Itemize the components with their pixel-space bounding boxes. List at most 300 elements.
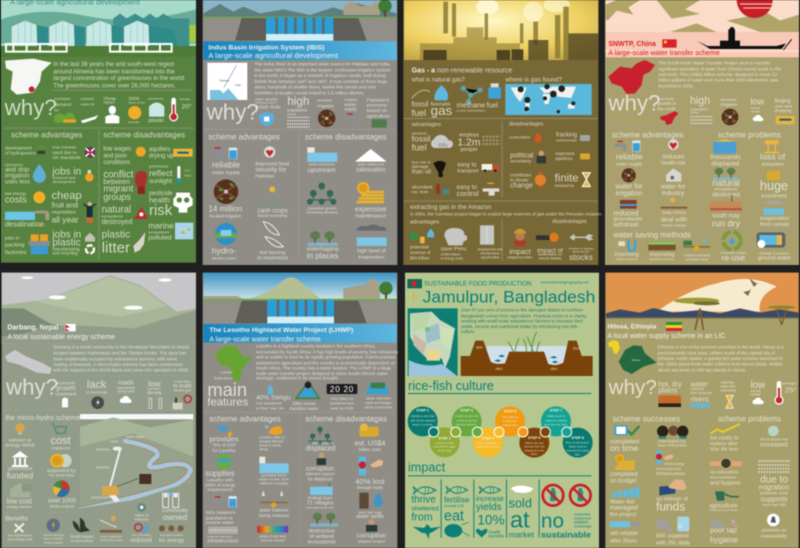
- disadvantage: expensive maintenance: [355, 182, 387, 219]
- heading: main features: features: [207, 396, 249, 408]
- advantage: easy to control: [457, 183, 499, 198]
- reason: farmland irrigation: [721, 97, 738, 125]
- disadvantage: climate change: contributes: [510, 172, 531, 177]
- disadvantage: declining fish stocks: stocks: [569, 252, 593, 262]
- success: no misuse of funds: no misuse of: [656, 497, 688, 503]
- benefit: less deforestation: [159, 525, 185, 544]
- success: completed on time: on time: [610, 443, 639, 453]
- title: Hitosa, Ethiopia: [607, 323, 657, 330]
- advantage: hydroponics: development: [5, 145, 32, 150]
- heading: disadvantages: disadvantages: [509, 121, 544, 127]
- text block: introduction: The greenhouses cover over 26,000 hectares.: [53, 83, 176, 89]
- disadvantage: pesticide health risk: [149, 191, 193, 219]
- advantage: less risk than oil: [412, 159, 446, 177]
- advantage: fresh water: [259, 457, 289, 486]
- advantage: fish farming: [257, 222, 288, 261]
- heading: main features: [207, 379, 249, 408]
- reason: low rainfall: low: [751, 97, 765, 107]
- success: small charge: small charge: [664, 462, 685, 466]
- advantage: drip irrigation: uses less: [5, 180, 30, 186]
- disadvantage: Polihali Dam villages: lose agricultural land: [306, 506, 334, 510]
- text block: introduction: the 1990s piped fresh water 140kms from Mount Bada, 4000m: [658, 362, 783, 367]
- scheme: solution to energy deficit: energy deficit: [5, 443, 35, 449]
- reason: economic growth: [657, 96, 678, 125]
- reason: cheap migrant labour: migrant: [103, 101, 115, 105]
- advantage: provides GDP: 75% of GDP: [212, 443, 236, 448]
- text block: introduction: The Indus River is an important water source for Pakistan and India,: [254, 61, 390, 66]
- advantage: drip irrigation: irrigation: [5, 173, 30, 180]
- disadvantage: climate change: to climate: [510, 177, 529, 182]
- step 1: Identify a site that: [411, 414, 435, 418]
- title band with boat: A large-scale water transfer scheme: [608, 50, 720, 57]
- success: managed by local communities: [657, 426, 688, 448]
- step 5: purified for: [503, 419, 517, 423]
- reason: lack of electricity: of electricity: [86, 390, 107, 395]
- step 8: reduced for catch: [566, 449, 590, 453]
- impact: no chemicals sustainable: sustainable: [541, 529, 591, 539]
- problem: poor tap hygiene: poor tap: [710, 526, 737, 535]
- problem: no education: and hygiene: [710, 480, 741, 486]
- step 3: A ditch for the fish: [455, 414, 479, 418]
- disadvantage: salinisation: [355, 149, 387, 173]
- impact: no chemicals sustainable: knowledge: [574, 525, 591, 529]
- scene: savanna sunset: [606, 273, 799, 330]
- method: recharge ground water: [757, 232, 791, 262]
- title band: [203, 324, 397, 343]
- advantage: jobs in packing factories: [4, 234, 50, 256]
- disadvantage: expensive maintenance: maintenance: [355, 213, 386, 219]
- scheme: low cost energy: low cost: [7, 498, 32, 505]
- benefit: less deforestation: for energy: [159, 538, 185, 544]
- scene: Himalayan mountains: [2, 273, 196, 343]
- text block: introduction: [658, 60, 782, 88]
- advantage: drip irrigation: and drip: [5, 167, 29, 174]
- disadvantage: natural ecosystems destroyed: ecosystems: [102, 213, 123, 218]
- disadvantage: poor can't pay tariffs: [356, 493, 384, 520]
- panel: Darbang Nepal: [2, 273, 196, 548]
- disadvantage: US$4 billion: est. US$4: [355, 440, 385, 447]
- title: Darbang, Nepal: [7, 324, 59, 331]
- impact: increase yields 10%: benefits: [489, 534, 504, 539]
- advantage: improved transport infrastructure: infrastructure: [207, 538, 238, 544]
- problem: risk of disease: [760, 426, 788, 449]
- problem: too costly to replace: 30yr life time: [710, 446, 738, 452]
- success: no misuse of funds: [656, 479, 688, 514]
- text block: introduction: Ethiopia is one of the poorest countries in the world. Hitosa is a: [658, 345, 784, 350]
- disadvantage: 40% lost through leaks: [355, 457, 386, 490]
- reason: cheap migrant labour: [103, 96, 119, 123]
- disadvantage: low wages: and poor: [103, 153, 127, 159]
- text block: introduction: Darbang is a small community in the Himalayan Mountains in Nepal,: [53, 345, 190, 350]
- success: still reliable: [610, 521, 640, 545]
- advantage: cheap fruit and vegetables: all year: [52, 214, 79, 224]
- reason: water security: water security: [255, 97, 278, 101]
- disadvantage: deforestation impact: impact of: [537, 247, 563, 254]
- advantage: hydroponics: of hydroponics: [5, 150, 36, 155]
- method: re-use: increase water: [720, 250, 747, 255]
- advantage: cleanest fossil fuel: fossil: [412, 134, 431, 144]
- text block: introduction: [53, 62, 186, 89]
- reason: temperature: 25°: [785, 385, 797, 394]
- reason: lack of electricity: [86, 379, 107, 409]
- advantage: fish farming: fish farming: [260, 250, 286, 256]
- success: 65K supplied: 25L: [677, 524, 683, 528]
- text block: introduction: around Almeria has been transformed into the: [53, 69, 175, 75]
- advantage: hydroelectric power: electric power: [212, 255, 237, 260]
- problem: no education: [710, 458, 742, 486]
- disadvantage: destruction of wetlands: destruction: [309, 529, 335, 535]
- impact: fertilise and eat: eat: [444, 509, 464, 525]
- scheme: World Bank: The World Bank: [48, 474, 75, 478]
- title: A local water supply scheme in an LIC: [607, 333, 725, 340]
- disadvantage: waterlogging: in places: [307, 251, 338, 260]
- scheme: solution to energy deficit: [5, 423, 35, 449]
- scheme: World Bank: [47, 454, 76, 478]
- text block: introduction: above sea level, to 160 tap stands in Hitosa.: [658, 367, 746, 372]
- step 1: will not be washed: [410, 418, 435, 422]
- impact: increase yields 10%: 10%: [477, 512, 505, 527]
- reason: reliable water supply: water: [344, 102, 357, 108]
- advantage: water balance: [259, 490, 289, 518]
- disadvantage: aquifers drying: [149, 147, 193, 159]
- text block: introduction: subsistence agriculture and the country is economically dependent on: [256, 360, 396, 365]
- success: small charge: infrastructure: [656, 471, 685, 477]
- problem: too costly to replace: [710, 424, 740, 452]
- problem: thousands displaced: displaced: [711, 160, 740, 167]
- method: improving irrigation efficiency: [614, 240, 639, 261]
- benefit: risk of flooding reduced: reduced: [130, 538, 152, 544]
- success: managed by local communities: local communities: [657, 444, 687, 448]
- feature: dams and reservoirs: will be constructed: [365, 405, 392, 409]
- advantage: potential revenue: $34 billion: [410, 255, 430, 260]
- advantage: reliable water supply: reliable: [212, 160, 240, 170]
- reason: plastic: greenhouses: [148, 96, 164, 100]
- impact: sold at market: market: [509, 529, 535, 539]
- reason: roads inaccessible: roads: [118, 380, 134, 387]
- reason: sunshine: 3000: [128, 96, 140, 102]
- feature: 2020 counter: 20 20: [330, 384, 354, 394]
- heading: Amazon advantages: advantages: [410, 219, 439, 225]
- reason: Beijing water table: water table: [775, 104, 793, 108]
- reason: water security: [255, 97, 281, 127]
- benefit: community owned: owned: [163, 512, 188, 522]
- reason: high population: forces: [691, 111, 699, 115]
- reason: farmland irrigation: farmland: [721, 97, 736, 102]
- scene: greenhouses banner: [1, 0, 196, 57]
- disadvantage: 40% lost through leaks: through leaks: [357, 485, 383, 490]
- illustration: micro-hydro valley: [80, 414, 193, 548]
- advantage: reduced groundwater: [612, 200, 643, 229]
- text block: introduction: Bangladesh comes from agriculture. Practical Action is a charity: [461, 313, 587, 318]
- disadvantage: expensive pipelines: [555, 151, 590, 161]
- disadvantage: declining fish stocks: declining fish: [572, 250, 590, 254]
- problem: too costly to replace: replace after: [710, 441, 738, 447]
- advantage: cash crops: [257, 186, 288, 218]
- icon: methane: methane: [457, 101, 485, 110]
- reason: cheap migrant labour: cheap: [103, 96, 116, 101]
- advantage: water balance: being restored: [259, 513, 289, 518]
- disadvantage: fracking: controversial: [556, 139, 577, 143]
- reason: temperature: 20°: [182, 102, 192, 110]
- scheme: government funded: [7, 451, 33, 480]
- benefit: women healthcare: [100, 516, 122, 542]
- disadvantage: corruption support: affected support: [306, 471, 335, 476]
- step 4: [473, 427, 503, 457]
- advantage: supplies energy: [205, 454, 236, 492]
- disadvantage: people displaced: displaced: [306, 446, 336, 453]
- impact: no chemicals sustainable: [541, 485, 591, 539]
- impact: no chemicals sustainable: no: [541, 510, 564, 533]
- advantage: cheap fruit and vegetables: fruit and: [52, 200, 78, 209]
- advantage: cleanest fossil fuel: fuel: [412, 143, 427, 153]
- step 7: and rice into field.: [544, 423, 568, 427]
- disadvantage: waterlogging: waterlogging: [306, 247, 339, 253]
- advantage: employment and infrastructure: employment and: [478, 248, 502, 252]
- step 6: ditch.: [531, 452, 538, 456]
- advantage: help China deal with climate change: deal with: [661, 216, 687, 223]
- disadvantage: declining fish stocks: [568, 234, 594, 262]
- benefit: community owned: community: [162, 508, 188, 514]
- disadvantage: plastic litter: [102, 229, 145, 256]
- disadvantage: Polihali Dam villages: 71 villages: [307, 501, 334, 507]
- heading: scheme disadvantages: scheme disadvantages: [103, 131, 185, 140]
- advantage: employs 1.2m people: employs: [459, 132, 479, 138]
- scheme: solution to energy deficit: solution to: [9, 438, 32, 444]
- benefit: reliable energy supply: have a reliable: [44, 537, 63, 541]
- reason: roads inaccessible: during rains: [117, 390, 135, 394]
- advantage: improved food security: security for: [255, 166, 286, 173]
- reason: economic growth: [55, 380, 76, 407]
- problem: agriculture water: agriculture: [709, 503, 738, 509]
- advantage: jobs in plastic: and recycling: [52, 251, 78, 256]
- icon: methane: & other hydrocarbons: [457, 109, 486, 113]
- step 6: When the rice: [525, 441, 544, 445]
- heading: why: why?: [4, 95, 57, 120]
- advantage: save Peru money: save Peru: [441, 247, 466, 253]
- reason: low population density: [147, 378, 162, 408]
- benefit: low maintenance: [8, 523, 33, 541]
- advantage: help China deal with climate change: help China: [662, 210, 686, 216]
- problem: agriculture water: using too much water: [709, 508, 738, 512]
- reason: hot dry plains: plains: [658, 386, 678, 395]
- text block: introduction: been traditionally occupied by subsistence farmers, with some: [53, 356, 178, 361]
- success: completed on time: completed: [610, 438, 640, 445]
- reason: high population growth: growth: [287, 112, 297, 116]
- impact: no chemicals sustainable: expensive: [574, 512, 590, 516]
- advantage: save Peru money: US$4 billion: [441, 252, 460, 256]
- title: A local sustainable energy scheme: [7, 334, 115, 341]
- disadvantage: natural ecosystems destroyed: [102, 205, 148, 226]
- problem: no education: about sanitation: [710, 475, 736, 479]
- text block: introduction: located between Kathmandu and the Tibetan border. The area has: [53, 351, 187, 356]
- reason: high population: high: [690, 95, 710, 107]
- benefit: reliable energy supply: [43, 519, 64, 544]
- text block: introduction: surrounded by South Africa. It has high levels of poverty, few resources: [256, 349, 399, 354]
- reason: high population growth: [287, 95, 309, 127]
- reason: unaffordable power station: electric grid: [174, 388, 191, 392]
- disadvantage: impact on indigenous tribes: [507, 229, 533, 259]
- text block: introduction: trillion gallons of water over more than 1000 kilometres, was: [658, 78, 779, 83]
- reason: low population density: low: [148, 378, 162, 388]
- connector badges: [429, 427, 572, 437]
- advantage: improved food security: [255, 146, 289, 180]
- advantage: low energy costs: [5, 191, 45, 205]
- advantage: water for irrigation: irrigation: [616, 190, 643, 197]
- reason: roads inaccessible: [117, 380, 135, 406]
- diagram: rice-fish pond cross-section: ditch: [495, 367, 503, 371]
- scheme: government funded: government: [8, 466, 33, 471]
- success: managed by local communities: managed by: [658, 439, 686, 445]
- step 7: Water level is: [547, 414, 565, 418]
- benefit: risk of flooding reduced: [130, 524, 152, 544]
- problem: natural ecosystems destroyed: [712, 168, 740, 199]
- heading: scheme advantages: scheme advantages: [612, 131, 683, 140]
- reason: unaffordable power station: to build: [173, 384, 191, 390]
- icon: flammable gas: gas: [431, 103, 452, 118]
- reason: Beijing water table: [775, 99, 794, 124]
- disadvantage: low wages: [103, 147, 146, 166]
- problem: south may run dry: south may: [712, 214, 740, 220]
- advantage: jobs in plastic: jobs in: [51, 229, 81, 240]
- benefit: small impact on environment: on environment: [71, 539, 94, 543]
- scene: mountains and red sun: [606, 0, 799, 32]
- advantage: supplies energy: Lesotho with: [207, 478, 233, 483]
- problem: huge investment: [760, 171, 788, 199]
- map: Ethiopia: Hitosa: [632, 358, 640, 362]
- disadvantage: impact on indigenous tribes: indigenous tribes: [507, 255, 533, 259]
- icon: flammable gas: [431, 85, 452, 118]
- step 8: STEP 8: [571, 436, 584, 440]
- heading: extracting gas in the Amazon: extracting gas in the Amazon: [410, 204, 492, 211]
- reason: water collected rivers: rivers: [691, 395, 709, 404]
- disadvantage: water extraction upstream: upstream: [308, 167, 336, 174]
- step 3: [452, 406, 482, 436]
- map: China: [608, 60, 655, 94]
- title band with boat: SNWTP, China: [608, 41, 656, 48]
- disadvantage: corruption plagued: corruption: [357, 532, 386, 539]
- advantage: water to drought: provides water to: [259, 435, 285, 439]
- panel: Gas non-renewable resource: [403, 0, 603, 265]
- text block: introduction: two asian NEEs.The IBIS is the largest, continuous irrigation system: [254, 67, 391, 72]
- reason: increased demand: demand: [54, 102, 72, 107]
- benefit: small impact on environment: [70, 517, 95, 543]
- reason: water collected rivers: water: [690, 381, 708, 388]
- heading: water saving methods: water saving methods: [612, 231, 691, 240]
- title band: A large-scale water transfer scheme: [209, 336, 321, 343]
- disadvantage: marine ecosystems polluted: marine: [148, 220, 174, 230]
- title band: A large-scale agricultural development: [208, 51, 339, 60]
- success: Water Aid managed: [610, 487, 639, 518]
- problem: loss of antiquities: [760, 140, 786, 168]
- reason: unaffordable power station: [173, 380, 191, 409]
- step 1: [408, 406, 438, 436]
- title: Jamulpur Bangladesh: Jamulpur, Bangladesh: [423, 288, 595, 306]
- success: completed on budget: completed: [610, 472, 638, 478]
- step 2: around the edge: [434, 445, 456, 449]
- reason: water collected rivers: collected: [691, 387, 704, 391]
- disadvantage: destruction of wetlands: ecosystems: [308, 539, 336, 545]
- text block: introduction: yields, income and nutritional intake by introducing rice-fish: [461, 324, 578, 329]
- title: [607, 322, 725, 340]
- feature: 2020 counter: transferred each: [330, 401, 354, 405]
- text block: introduction: Lesotho is a highland country located in the southern Africa,: [256, 343, 375, 348]
- disadvantage: 40% lost through leaks: 40% lost: [355, 477, 386, 486]
- advantage: Maseru population water: population to: [206, 515, 233, 520]
- advantage: provides GDP: for Lesotho: [212, 448, 236, 453]
- heading: micro-hydro scheme: the micro-hydro scheme: [5, 415, 80, 422]
- heading: scheme advantages: scheme advantages: [209, 415, 281, 424]
- disadvantage: population growth demand: [307, 183, 337, 214]
- advantage: water for irrigation: [614, 168, 643, 197]
- reason: economic growth: growth in: [657, 101, 677, 106]
- disadvantage: declining fish stocks: includes of species: [568, 246, 594, 250]
- advantage: acidity of river: acidity of river level: [259, 535, 286, 539]
- icon: rice stalk: [413, 293, 414, 302]
- reason: hot dry plains: [658, 382, 682, 407]
- feature: 32km tunnel: transfers water: [290, 406, 319, 411]
- step 3: STEP 3: [460, 408, 473, 412]
- text block: introduction: The South-North Water Transfer Project aims to transfer: [658, 60, 771, 65]
- problem: evaporation from canals: from canals: [760, 222, 789, 228]
- advantage: fewer chemicals: UK standards: [52, 155, 81, 160]
- benefit: small impact on environment: small impact: [70, 534, 95, 539]
- title band: [203, 41, 397, 60]
- text block: introduction: predominantly rural area, 180km south of the capital city of: [658, 350, 776, 355]
- problem: risk of disease: risk of disease has: [760, 438, 788, 442]
- advantage: cheap fruit and vegetables: [52, 190, 96, 224]
- panel: Jamulpur Bangladesh: [405, 273, 599, 548]
- text block: introduction: [461, 308, 587, 334]
- advantage: cleanest fossil fuel: CO₂: [438, 143, 448, 149]
- disadvantage: corruption support: for displaced: [308, 477, 333, 482]
- reason: high population growth: population: [287, 108, 308, 113]
- impact: increase yields 10%: yields: [476, 502, 502, 513]
- advantage: acidity of river: reservoir reduced: [260, 539, 285, 543]
- disadvantage: poor can't pay tariffs: water tariffs: [356, 514, 384, 520]
- reason: high population growth: high: [287, 95, 309, 108]
- icon: fuel: [487, 83, 501, 110]
- advantage: reliable water: reliable: [616, 151, 643, 161]
- advantage: reduces health risk: health risk: [661, 160, 686, 166]
- disadvantage: evaporation: [356, 225, 387, 261]
- advantage: less risk than oil: than oil: [412, 170, 431, 176]
- icon: fossil fuel: fuel: [412, 108, 426, 118]
- reason: high population: population: [691, 107, 708, 111]
- impact: increase yields 10%: health: [489, 529, 501, 534]
- advantage: fewer chemicals: [52, 145, 95, 160]
- disadvantage: fracking: fracking: [556, 133, 577, 139]
- feature: 40% Sengu river: to River Vaal, SA: [256, 406, 284, 410]
- advantage: acidity of river: [257, 526, 288, 543]
- reason: roads inaccessible: inaccessible: [117, 386, 135, 390]
- advantage: potential revenue: [409, 229, 434, 260]
- panel: Hitosa Ethiopia: [605, 273, 799, 548]
- advantage: improved food security: improved food: [255, 161, 289, 167]
- advantage: fresh water: provides fresh: [261, 473, 287, 478]
- advantage: cleanest fossil fuel: cleanest: [412, 131, 427, 136]
- reason: sunshine: hours of sun: [128, 101, 145, 105]
- reason: increased demand: increased: [54, 97, 70, 101]
- reason: temperature: average: [179, 97, 190, 101]
- advantage: cheap fruit and vegetables: cheap: [52, 190, 82, 202]
- benefit: reliable energy supply: energy supply: [44, 540, 63, 544]
- disadvantage: corruption support: [306, 452, 335, 482]
- reason: reliable water supply: [344, 97, 358, 124]
- problem: evaporation from canals: evaporation: [760, 216, 789, 222]
- benefit: women healthcare: and fresher plant: [100, 538, 122, 542]
- reason: Beijing water table: Beijing: [775, 99, 791, 105]
- disadvantage: impact on indigenous tribes: impact: [509, 247, 531, 256]
